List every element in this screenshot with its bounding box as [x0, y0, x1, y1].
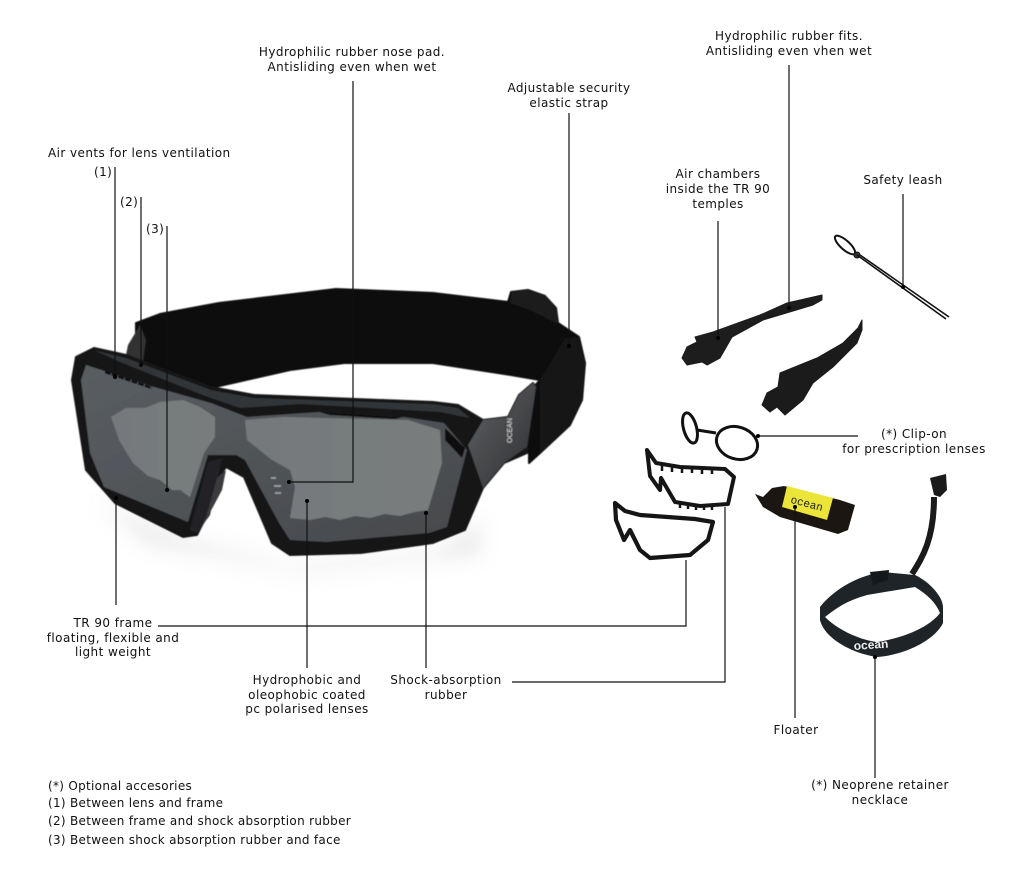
leader lines — [113, 65, 905, 778]
label: elastic strap: elastic strap — [529, 96, 609, 110]
label: air chambers: temples — [692, 197, 744, 211]
safety leash — [832, 233, 949, 319]
neoprene retainer necklace — [820, 474, 947, 657]
label: shock absorption: rubber — [425, 688, 467, 702]
label: floater: Floater — [774, 723, 818, 737]
legend: (3) Between shock absorption rubber and face — [48, 833, 341, 847]
TR 90 frame part — [615, 503, 713, 558]
label: nose pad: Antisliding even when wet — [268, 60, 436, 74]
label: TR 90 frame: TR 90 frame — [74, 616, 152, 630]
clip-on frame — [680, 411, 762, 465]
label: vent 3: (3) — [146, 222, 164, 236]
legend: (2) Between frame and shock absorption rubber — [48, 814, 351, 828]
floater: ocean — [789, 495, 824, 515]
label: TR 90 frame: floating, flexible and — [47, 631, 179, 645]
temple arm — [468, 383, 536, 488]
label: lenses: pc polarised lenses — [245, 702, 369, 716]
label: necklace: (*) Neoprene retainer — [811, 778, 949, 792]
label: shock absorption: Shock-absorption — [390, 673, 502, 687]
label: lenses: Hydrophobic and — [253, 673, 361, 687]
label: safety leash: Safety leash — [863, 173, 943, 187]
label: air chambers: Air chambers — [676, 167, 760, 181]
label: TR 90 frame: light weight — [75, 645, 151, 659]
label: clip-on: (*) Clip-on — [881, 427, 947, 441]
logo: OCEAN — [507, 418, 514, 443]
lens — [81, 365, 467, 542]
label: vent 1: (1) — [94, 165, 112, 179]
label: lenses: oleophobic coated — [248, 688, 366, 702]
nose piece — [190, 458, 222, 533]
temple right — [762, 320, 862, 415]
label: necklace: necklace — [852, 793, 908, 807]
label: rubber fits: Hydrophilic rubber fits. — [715, 29, 863, 43]
frame — [72, 348, 536, 555]
label: clip-on: for prescription lenses — [842, 442, 986, 456]
legend: (*) Optional accesories — [48, 779, 192, 793]
label: air chambers: inside the TR 90 — [666, 182, 770, 196]
strap buckle — [510, 290, 558, 324]
label: vent 2: (2) — [120, 195, 138, 209]
label: rubber fits: Antisliding even vhen wet — [706, 44, 872, 58]
label: nose pad: Hydrophilic rubber nose pad. — [259, 45, 445, 59]
label: air vents: Air vents for lens ventilation — [48, 146, 231, 160]
shock-absorption rubber — [647, 450, 734, 510]
goggles photo — [72, 289, 585, 572]
neoprene retainer necklace: ocean — [853, 637, 889, 653]
elastic strap — [136, 289, 585, 463]
temple left — [682, 295, 822, 365]
label: elastic strap: Adjustable security — [507, 81, 631, 95]
legend: (1) Between lens and frame — [48, 796, 223, 810]
floater — [755, 486, 855, 534]
